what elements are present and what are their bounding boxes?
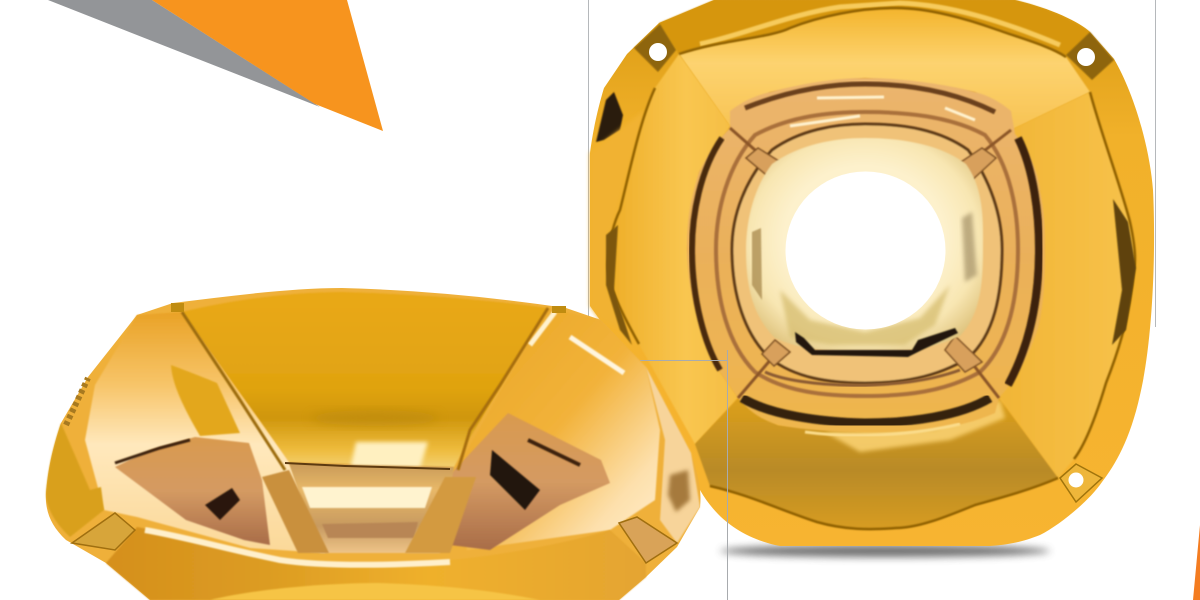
orange corner accent [1193, 525, 1200, 600]
bowl golden bottom [780, 285, 950, 345]
embossed mark [66, 378, 88, 425]
right blotch [668, 470, 690, 512]
ring mid band [716, 112, 1018, 396]
orange triangle [152, 0, 383, 131]
right pillar [405, 477, 476, 553]
left back crease [182, 312, 285, 470]
ring inner line [732, 124, 1002, 383]
left screw tab [72, 513, 135, 550]
bowl dark reflection bottom [795, 328, 958, 357]
left rim reflection [596, 92, 623, 142]
ring bottom highlight [805, 424, 960, 435]
left wall wedge [171, 365, 240, 436]
throat bright band [302, 487, 432, 508]
left pillar [262, 470, 329, 553]
horn shadow [720, 545, 1050, 557]
bottom panel [695, 398, 1058, 529]
bowl reflection right [962, 212, 977, 282]
throat dark line [285, 463, 450, 469]
top panel [679, 8, 1090, 130]
grey connector line horizontal [640, 360, 728, 361]
bowl reflection left [752, 228, 762, 300]
grey guide line left [588, 0, 589, 318]
right far panel [646, 367, 700, 543]
screw tab bottom right [1060, 464, 1102, 502]
left dark upper edge [115, 440, 190, 463]
gold horn side view [46, 288, 701, 600]
left far panel [46, 423, 104, 537]
gold horn front view [590, 0, 1154, 546]
corner clips [746, 148, 996, 372]
left panel [608, 54, 738, 444]
rim contour line [608, 8, 1135, 529]
right wall [450, 308, 660, 550]
lip lower band [210, 583, 540, 600]
front lip [106, 527, 646, 600]
side horn outline [46, 288, 701, 600]
rim shine right [1112, 199, 1136, 345]
small top tab left [171, 303, 184, 312]
back panel [182, 292, 548, 467]
top rim highlight [700, 3, 1060, 45]
left dark reflection [205, 488, 240, 520]
right bright crease [530, 312, 555, 345]
back panel shade [310, 410, 440, 426]
ring bottom dark band [742, 398, 990, 423]
centre hole [786, 172, 946, 330]
right panel [999, 92, 1135, 478]
back panel highlight [350, 442, 428, 470]
bottom panel highlight [825, 400, 1005, 452]
throat lower band [322, 522, 418, 538]
screw tab top left [634, 24, 676, 72]
left copper reflection [115, 437, 270, 545]
grey connector line vertical [727, 350, 728, 600]
corner diagonals [730, 128, 1011, 398]
top rim band [659, 0, 1090, 57]
left rim yellow [590, 110, 645, 330]
small top tab right [552, 306, 566, 313]
horn body outline [590, 0, 1154, 546]
rim shine left [606, 225, 632, 345]
central throat [289, 463, 454, 553]
screw tab top right [1066, 32, 1114, 80]
ring top dark band [745, 84, 995, 112]
ring bottom copper line [765, 370, 960, 385]
ring left dark band [692, 138, 722, 370]
grey triangle [48, 0, 320, 107]
inner bowl [746, 138, 983, 352]
ring right dark band [1008, 138, 1039, 385]
right copper reflection [445, 413, 610, 550]
right dark upper edge [528, 440, 580, 465]
lip highlight [145, 530, 450, 565]
left wall [85, 312, 325, 553]
right screw tab [619, 517, 677, 563]
right dark reflection [490, 450, 540, 510]
right wall white streak [570, 337, 624, 373]
right back crease [458, 308, 548, 470]
grey guide line right [1155, 0, 1156, 327]
horn ring [687, 78, 1045, 432]
ring highlights top [790, 97, 975, 126]
